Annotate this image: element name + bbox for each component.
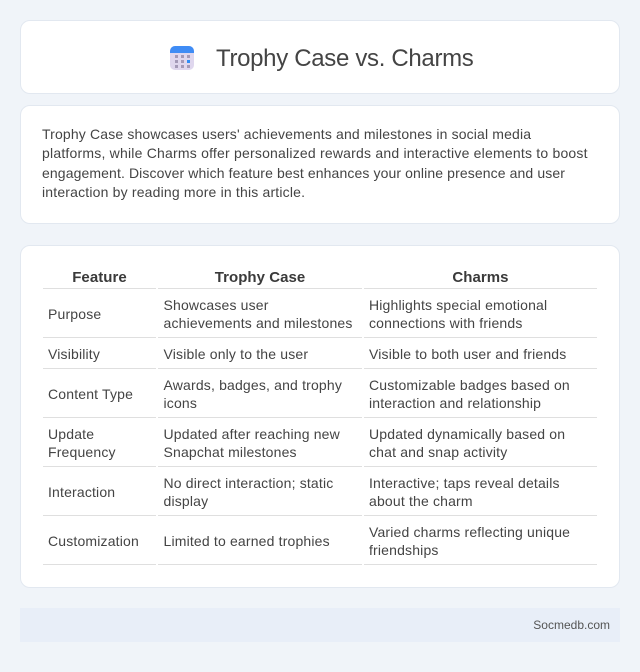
row: Update Frequency: Snapchat milestones (164, 444, 297, 460)
row: Update Frequency: Update (48, 426, 94, 442)
row: Interaction: Interaction (48, 484, 115, 500)
icon: calendar (170, 46, 194, 70)
row: Content Type: icons (164, 395, 197, 411)
row: Customization: Customization (48, 533, 139, 549)
intro text (42, 126, 588, 200)
row: Purpose (43, 297, 597, 338)
row: Update Frequency: Updated dynamically based on (369, 426, 565, 442)
row: Purpose: Showcases user (164, 297, 269, 313)
row: Purpose: Purpose (48, 306, 101, 322)
footer (20, 608, 620, 642)
row: Customization (43, 524, 597, 565)
row: Customization: friendships (369, 542, 439, 558)
row: Interaction: display (164, 493, 208, 509)
footer credit: Socmedb.com (533, 618, 610, 632)
table header row: Feature (72, 269, 127, 286)
row: Customization: Varied charms reflecting unique (369, 524, 570, 540)
row: Content Type: Content Type (48, 386, 133, 402)
table header row (43, 269, 597, 289)
row: Interaction: No direct interaction; static (164, 475, 333, 491)
row: Purpose: Highlights special emotional (369, 297, 547, 313)
panel: intro (20, 105, 620, 224)
row: Update Frequency: Updated after reaching new (164, 426, 340, 442)
row: Interaction: about the charm (369, 493, 473, 509)
row: Purpose: achievements and milestones (164, 315, 353, 331)
row: Customization: Limited to earned trophies (164, 533, 330, 549)
row: Update Frequency (43, 426, 597, 467)
panel: header (20, 20, 620, 94)
row: Visibility: Visibility (48, 346, 100, 362)
intro text: interaction by reading more in this article. (42, 184, 305, 200)
table header row: Trophy Case (215, 269, 305, 286)
intro text: Trophy Case showcases users' achievements and milestones in social media (42, 126, 531, 142)
row: Content Type: interaction and relationship (369, 395, 541, 411)
row: Purpose: connections with friends (369, 315, 522, 331)
row: Content Type (43, 377, 597, 418)
row: Visibility: Visible to both user and friends (369, 346, 566, 362)
row: Update Frequency: Frequency (48, 444, 116, 460)
row: Visibility (43, 346, 597, 369)
intro text: engagement. Discover which feature best enhances your online presence and user (42, 165, 565, 181)
table header row: Charms (452, 269, 509, 286)
row: Content Type: Customizable badges based on (369, 377, 570, 393)
intro text: platforms, while Charms offer personalized rewards and interactive elements to boost (42, 145, 588, 161)
row: Update Frequency: chat and snap activity (369, 444, 507, 460)
row: Visibility: Visible only to the user (164, 346, 308, 362)
row: Content Type: Awards, badges, and trophy (164, 377, 342, 393)
panel: comparison table (20, 245, 620, 588)
row: Interaction: Interactive; taps reveal details (369, 475, 560, 491)
row: Interaction (43, 475, 597, 516)
title: Trophy Case vs. Charms (216, 45, 473, 72)
